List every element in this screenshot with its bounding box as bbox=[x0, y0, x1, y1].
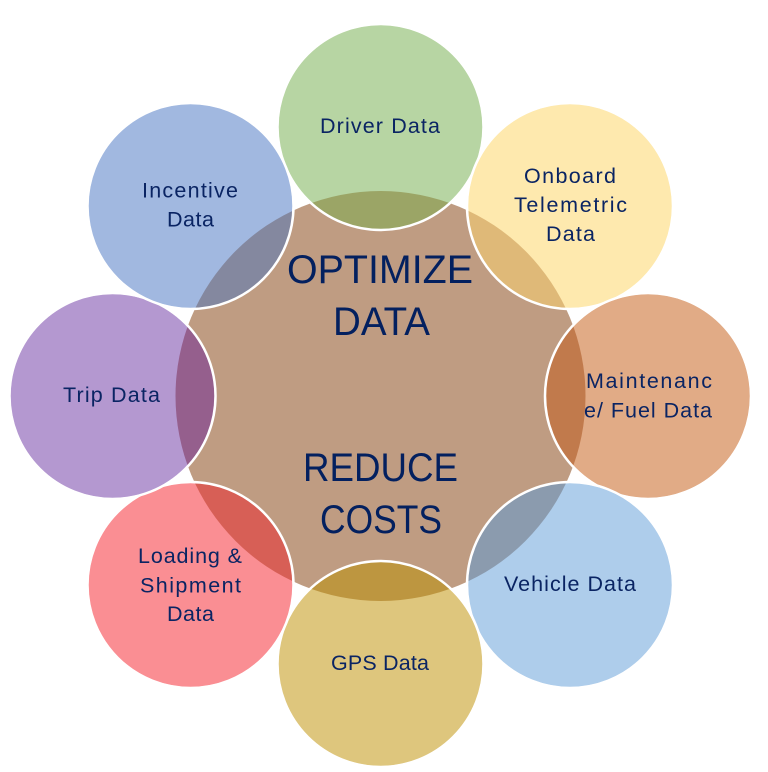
circle: Loading and Shipment Data: Loading & bbox=[138, 544, 242, 568]
heading: Optimize Data: DATA bbox=[333, 300, 431, 344]
heading: Optimize Data: OPTIMIZE bbox=[287, 248, 473, 292]
heading: Reduce Costs bbox=[303, 446, 458, 542]
circle: Maintenance / Fuel Data bbox=[545, 293, 751, 499]
heading: Reduce Costs: REDUCE bbox=[303, 446, 458, 490]
circle: Driver Data bbox=[278, 24, 484, 230]
circle: GPS Data: GPS Data bbox=[331, 651, 429, 675]
circle: Incentive Data: Data bbox=[167, 208, 214, 232]
circle: Loading and Shipment Data: Data bbox=[167, 602, 214, 626]
circle: Trip Data: Trip Data bbox=[63, 383, 160, 407]
circle: Vehicle Data: Vehicle Data bbox=[504, 572, 636, 596]
circle: Maintenance / Fuel Data: Maintenanc bbox=[586, 369, 712, 393]
circle: Driver Data: Driver Data bbox=[320, 114, 440, 138]
circle: Onboard Telemetric Data: Telemetric bbox=[514, 193, 627, 217]
circle: Loading and Shipment Data bbox=[88, 482, 294, 688]
circle: Incentive Data bbox=[88, 103, 294, 309]
circle: Onboard Telemetric Data: Data bbox=[546, 222, 595, 246]
circle: Vehicle Data bbox=[467, 482, 673, 688]
circle: GPS Data bbox=[278, 561, 484, 767]
circle: Onboard Telemetric Data: Onboard bbox=[524, 164, 616, 188]
circle: Trip Data bbox=[10, 293, 216, 499]
central circle bbox=[176, 191, 586, 601]
circle: Maintenance / Fuel Data: e/ Fuel Data bbox=[584, 398, 712, 422]
circle: Onboard Telemetric Data bbox=[467, 103, 673, 309]
circle: Incentive Data: Incentive bbox=[142, 178, 238, 202]
circle: Loading and Shipment Data: Shipment bbox=[140, 574, 241, 598]
heading: Reduce Costs: COSTS bbox=[320, 498, 442, 542]
heading: Optimize Data bbox=[287, 248, 473, 344]
